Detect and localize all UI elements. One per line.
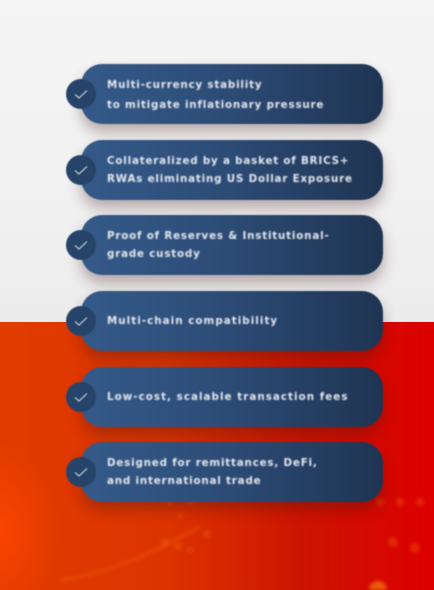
background: red-orange lower panel [0,322,434,590]
feature text: Collateralized by a basket of BRICS+ [107,154,349,166]
feature pill 3 [65,214,392,290]
pill body [81,215,383,275]
feature pill 1 [65,63,392,140]
feature pill 5 [65,366,390,442]
pill body [81,140,383,200]
feature pill 6 [65,441,390,517]
feature text [106,154,353,185]
feature text: grade custody [107,248,201,260]
pill body [81,291,383,351]
pill body [81,64,383,124]
icon: check badge [65,456,96,488]
feature text: to mitigate inflationary pressure [107,99,324,111]
icon: check badge [65,154,96,186]
feature text: Designed for remittances, DeFi, [107,456,318,468]
icon: check badge [65,229,96,261]
feature text: Multi-chain compatibility [107,315,278,327]
background: light upper panel [0,0,434,322]
feature text: Multi-currency stability [107,79,262,91]
feature pill 4 [65,290,391,366]
icon: check badge [65,305,96,337]
feature text: and international trade [107,475,261,487]
feature text [106,456,318,487]
feature text: RWAs eliminating US Dollar Exposure [107,173,353,185]
icon: check badge [65,78,96,110]
feature text: Low-cost, scalable transaction fees [107,391,349,403]
feature text [106,79,324,111]
pill body [81,367,383,427]
feature text [106,230,330,260]
icon: check badge [65,381,96,413]
pill body [81,442,383,502]
feature pill 2 [65,139,392,215]
feature text: Proof of Reserves & Institutional- [107,230,330,242]
